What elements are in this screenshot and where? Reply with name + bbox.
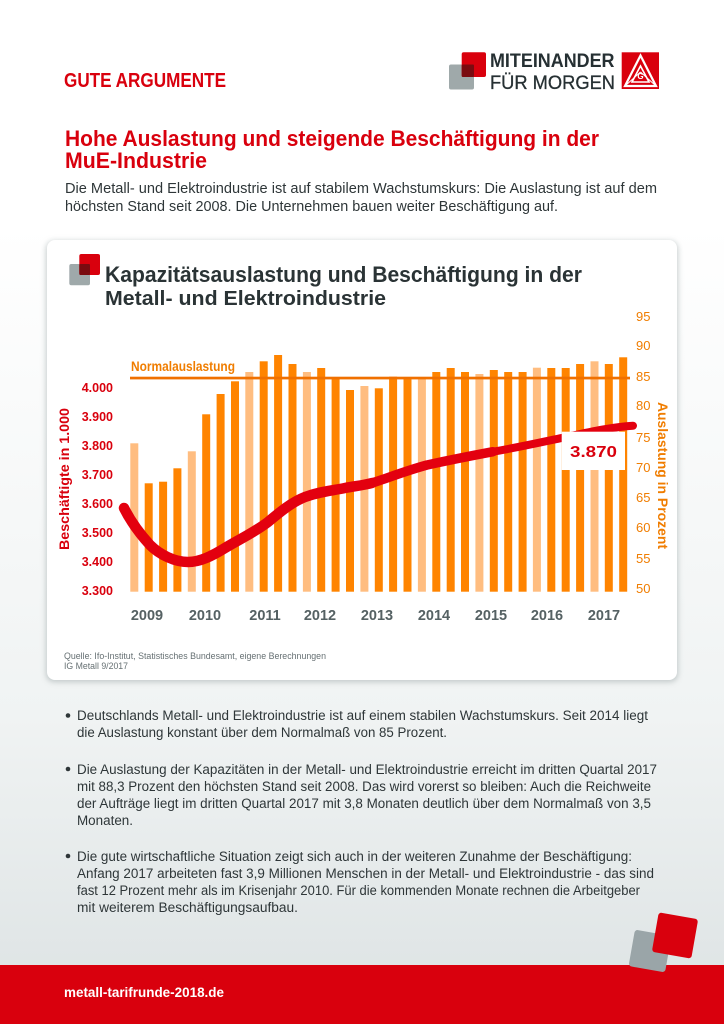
logo: Miteinander für Morgen: MITEINANDER xyxy=(490,50,614,72)
bar chart: capacity utilisation xyxy=(130,355,627,592)
right axis: percent: 50 xyxy=(636,581,650,596)
reference line: Normalauslastung: Normalauslastung xyxy=(131,359,235,374)
logo: Miteinander für Morgen: FÜR MORGEN xyxy=(490,72,615,94)
source note: Quelle: Ifo-Institut, Statistisches Bundesamt, eigene Berechnungen xyxy=(64,651,326,661)
right axis: percent: 85 xyxy=(636,369,650,384)
panel: chart card xyxy=(46,240,678,682)
source note xyxy=(64,651,326,671)
x axis years: 2016 xyxy=(531,608,563,624)
left axis: employees: 3.800 xyxy=(82,439,113,453)
x axis years: 2015 xyxy=(475,608,507,624)
text block: bullet 2: mit 88,3 Prozent den höchsten Stand seit 2008. Das wird vorerst so bleiben: Auch die Reichweite xyxy=(77,779,651,794)
callout: 3.870 xyxy=(562,432,625,470)
left axis: employees xyxy=(82,381,113,598)
left axis: employees: 3.500 xyxy=(82,526,113,540)
source note: IG Metall 9/2017 xyxy=(64,661,128,671)
logo: Miteinander für Morgen xyxy=(449,50,659,94)
icon: decorative rotated squares xyxy=(629,912,698,972)
left axis title: Beschäftigte in 1.000 xyxy=(56,408,72,550)
right axis: percent xyxy=(636,309,650,596)
logo: Miteinander für Morgen: G xyxy=(637,72,644,81)
right axis: percent: 75 xyxy=(636,430,650,445)
text block: bullet 3: Die gute wirtschaftliche Situation zeigt sich auch in der weiteren Zunahme der Beschäftigung: xyxy=(77,849,632,864)
text block: bullet 3: Anfang 2017 arbeiteten fast 3,9 Millionen Menschen in der Metall- und Elektroindustrie - das sind xyxy=(77,866,654,881)
main heading: Hohe Auslastung und steigende Beschäftigung in der xyxy=(65,126,599,151)
right axis: percent: 55 xyxy=(636,551,650,566)
intro text xyxy=(65,181,657,215)
right axis: percent: 60 xyxy=(636,520,650,535)
left axis: employees: 3.600 xyxy=(82,497,113,511)
text block: bullet 2 xyxy=(66,762,657,828)
left axis: employees: 3.700 xyxy=(82,468,113,482)
x axis years: 2013 xyxy=(361,608,393,624)
main heading: MuE-Industrie xyxy=(65,148,207,173)
intro text: Die Metall- und Elektroindustrie ist auf stabilem Wachstumskurs: Die Auslastung ist auf dem xyxy=(65,181,657,197)
left axis: employees: 4.000 xyxy=(82,381,113,395)
chart title: Metall- und Elektroindustrie xyxy=(105,288,386,310)
right axis: percent: 65 xyxy=(636,490,650,505)
text block: bullet 2: der Aufträge liegt im dritten Quartal 2017 mit 3,8 Monaten deutlich über dem Normalmaß von 3,5 xyxy=(77,796,651,811)
x axis years: 2010 xyxy=(189,608,221,624)
x axis years: 2012 xyxy=(304,608,336,624)
text block: bullet 2: Monaten. xyxy=(77,813,133,828)
chart title xyxy=(105,262,582,310)
main heading xyxy=(65,126,599,173)
left axis: employees: 3.900 xyxy=(82,410,113,424)
right axis title: Auslastung in Prozent xyxy=(655,402,671,549)
x axis years: 2017 xyxy=(588,608,620,624)
text block: bullet 1: Deutschlands Metall- und Elektroindustrie ist auf einem stabilen Wachstumskurs. Seit 2014 liegt xyxy=(77,708,648,723)
right axis: percent: 90 xyxy=(636,338,650,353)
chart title: Kapazitätsauslastung und Beschäftigung in der xyxy=(105,262,582,287)
x axis years: 2009 xyxy=(131,608,163,624)
icon: overlapping squares xyxy=(69,254,100,285)
x axis years xyxy=(131,608,620,624)
text block: bullet 2: Die Auslastung der Kapazitäten in der Metall- und Elektroindustrie erreicht im dritten Quartal 2017 xyxy=(77,762,657,777)
callout: 3.870: 3.870 xyxy=(570,444,617,461)
footer band: metall-tarifrunde-2018.de xyxy=(64,984,224,1000)
right axis: percent: 95 xyxy=(636,309,650,324)
text block: bullet 3: fast 12 Prozent mehr als im Krisenjahr 2010. Für die kommenden Monate rechnen die Arbeitgeber xyxy=(77,883,640,898)
left axis: employees: 3.300 xyxy=(82,584,113,598)
text block: bullet 3: mit weiterem Beschäftigungsaufbau. xyxy=(77,900,298,915)
left axis: employees: 3.400 xyxy=(82,555,113,569)
line chart: employment xyxy=(124,426,633,562)
text block: bullet 3 xyxy=(66,849,654,915)
text block: bullet 1: die Auslastung konstant über dem Normalmaß von 85 Prozent. xyxy=(77,725,447,740)
footer band xyxy=(0,965,724,1024)
text block: bullet 1 xyxy=(66,708,648,740)
right axis: percent: 70 xyxy=(636,460,650,475)
right axis: percent: 80 xyxy=(636,398,650,413)
kicker: Gute Argumente: GUTE ARGUMENTE xyxy=(64,70,226,92)
x axis years: 2011 xyxy=(249,608,281,624)
intro text: höchsten Stand seit 2008. Die Unternehmen bauen weiter Beschäftigung auf. xyxy=(65,199,558,215)
x axis years: 2014 xyxy=(418,608,450,624)
